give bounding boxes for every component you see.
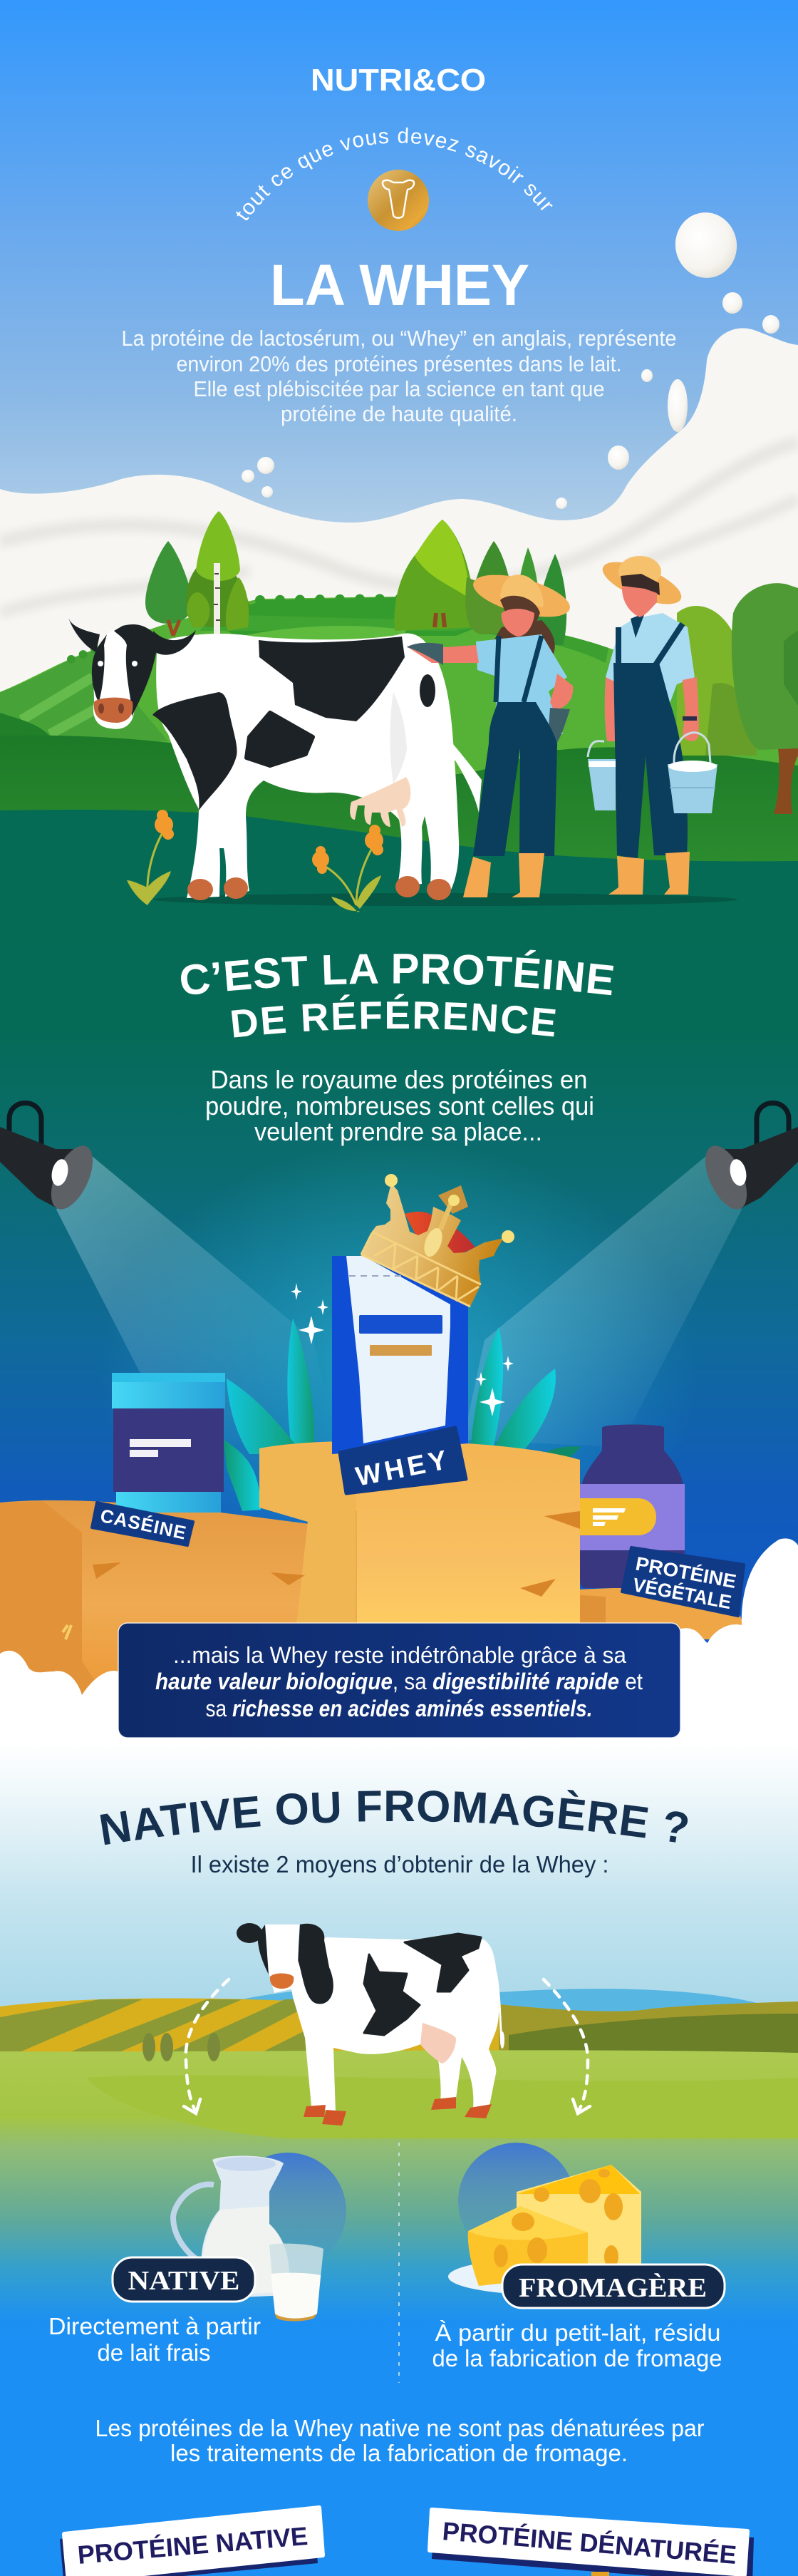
divider [398,2143,400,2383]
farmer: woman [407,567,574,897]
icon: gold cow medallion [368,170,429,231]
landscape: farm hills [0,597,798,891]
arrow: left dashed [184,1979,229,2113]
icon: milk jug and glass [173,2153,346,2321]
product: whey package [332,1256,468,1454]
sparkles [291,1283,514,1416]
background: sky [0,0,798,570]
label: whey [340,1428,466,1493]
callout panel: ...mais la Whey reste indétrônable grâce à sa [173,1642,626,1668]
logo: NUTRI&CO [311,63,486,98]
heading: native ou fromagere: NATIVE OU FROMAGÈRE ? [100,1789,688,1845]
milk wave [0,328,798,784]
intro paragraph: environ 20% des protéines présentes dans le lait. [177,351,621,376]
paragraph: native proteins: les traitements de la fabrication de fromage. [170,2440,628,2466]
milk drops [242,207,779,509]
background: mid section gradient [0,927,798,1675]
trees: right group [677,583,798,814]
paragraph: royaume: veulent prendre sa place... [254,1117,542,1146]
label: caseine: CASÉINE [98,1505,188,1544]
product: casein jar [112,1373,225,1513]
intro paragraph: protéine de haute qualité. [281,401,517,426]
subheading: Il existe 2 moyens d’obtenir de la Whey : [191,1851,608,1877]
icon: right spotlight [697,1103,798,1215]
title: LA WHEY [270,253,529,318]
text: native description: Directement à partir [48,2313,261,2339]
cow: farm [68,617,737,906]
landscape: fields [0,1987,798,2352]
clouds [0,1538,798,1746]
spotlight beams [56,1155,742,1447]
arc subtitle: tout ce que vous devez savoir sur [236,127,553,221]
intro paragraph: La protéine de lactosérum, ou “Whey” en anglais, représente [121,326,677,351]
paragraph: royaume: Dans le royaume des protéines en [211,1065,587,1094]
intro paragraph: Elle est plébiscitée par la science en tant que [194,376,604,401]
icon: left spotlight [0,1103,101,1215]
hay bales [0,1441,743,1711]
label: proteine native: PROTÉINE NATIVE [76,2521,309,2570]
heading: reference protein: DE RÉFÉRENCE [231,994,556,1038]
icon: cheese [448,2143,651,2295]
label: proteine vegetale: PROTÉINE [634,1552,738,1592]
flowers [127,810,383,912]
callout panel: haute valeur biologique, sa digestibilité rapide et [155,1669,643,1694]
text: fromagere description [432,2319,722,2371]
text: native description: de lait frais [97,2339,211,2366]
cow: native section [237,1923,504,2126]
central glow [99,1140,698,1611]
callout panel: sa richesse en acides aminés essentiels. [205,1696,593,1721]
plants behind package [224,1318,581,1511]
callout panel [118,1623,680,1738]
paragraph: native proteins: Les protéines de la Whey native ne sont pas dénaturées par [95,2415,705,2441]
trees: centre group [394,520,566,645]
heading: reference protein: C’EST LA PROTÉINE [181,949,613,995]
text: native description [48,2313,261,2366]
milk buckets [588,733,717,813]
ground: teal foreground [0,810,798,941]
pill: fromagere [502,2265,725,2308]
trees: distant [142,2033,220,2061]
text: fromagere description: À partir du petit-lait, résidu [435,2319,721,2346]
intro paragraph [121,326,677,426]
paragraph: royaume [205,1065,594,1146]
trees: left group [145,511,249,636]
arrow: right dashed [544,1979,590,2113]
pill: native [113,2257,255,2302]
label: proteine native [60,2508,323,2576]
label: proteine vegetale [622,1547,744,1616]
label: proteine denaturee: PROTÉINE DÉNATURÉE [441,2516,737,2570]
pill: native: NATIVE [128,2266,239,2296]
background: lower section gradient [0,1739,798,2067]
heading: reference protein [181,949,613,1038]
icon: crown [361,1174,514,1307]
paragraph: native proteins [95,2415,705,2466]
label: whey: WHEY [353,1445,452,1493]
text: fromagere description: de la fabrication de fromage [432,2345,722,2371]
paragraph: royaume: poudre, nombreuses sont celles qui [205,1091,594,1120]
product: bottle [580,1424,685,1588]
pill: fromagere: FROMAGÈRE [519,2273,707,2303]
farmer: man [597,553,699,895]
label: proteine vegetale: VÉGÉTALE [631,1573,733,1613]
